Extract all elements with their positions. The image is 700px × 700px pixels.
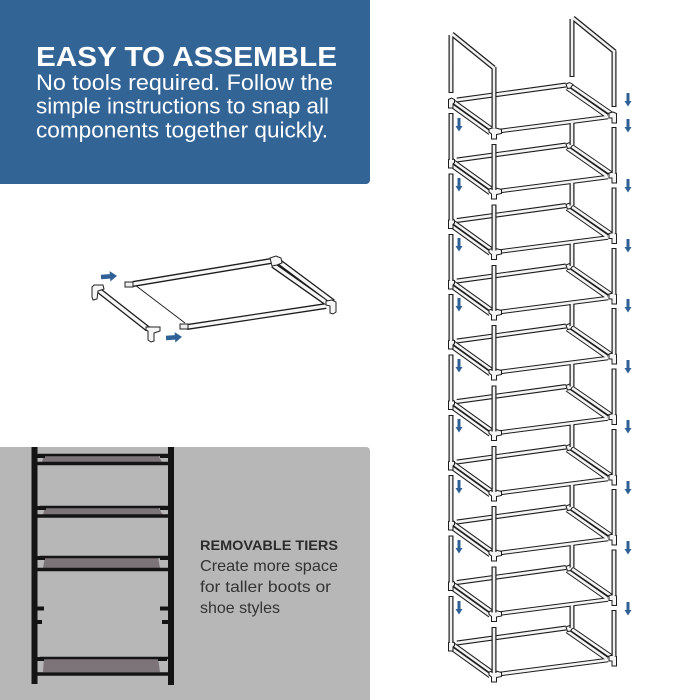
text block: instructions: No tools required. Follow the [36, 70, 333, 95]
tier 3 [448, 174, 616, 260]
tier 5 [448, 294, 616, 380]
text block: removable tiers: REMOVABLE TIERS [200, 538, 338, 553]
tier 8 [448, 475, 616, 561]
tier 9 [448, 536, 616, 622]
arrows: right side [624, 93, 632, 616]
tier 7 [448, 415, 616, 501]
panel: easy to assemble [0, 0, 370, 184]
tier 2 [448, 113, 616, 199]
text block: instructions: simple instructions to snap all [36, 94, 329, 118]
text block: instructions [36, 70, 333, 142]
detached rail [92, 285, 160, 342]
arrow: upper push [101, 271, 117, 282]
text block: removable tiers [200, 538, 338, 617]
text block: instructions: components together quickly. [36, 118, 328, 142]
top frame: rear U [572, 18, 615, 107]
tier 6 [448, 354, 616, 440]
heading: easy to assemble: EASY TO ASSEMBLE [36, 41, 337, 72]
tier 10 [448, 596, 616, 682]
illustration: exploded tower [448, 18, 632, 682]
text block: removable tiers: shoe styles [200, 600, 280, 617]
tier 1 [448, 82, 616, 139]
tier 4 [448, 234, 616, 320]
thin fabric edge [135, 285, 185, 323]
illustration: frame assembly [92, 256, 336, 343]
shelf fabric [42, 455, 163, 672]
text block: removable tiers: Create more space [200, 558, 338, 575]
top frame: front U [451, 34, 494, 128]
arrows: left side [456, 118, 462, 614]
panel: removable tiers [0, 447, 370, 700]
photo: shoe rack [33, 447, 173, 685]
arrow: lower push [166, 332, 182, 343]
text block: removable tiers: for taller boots or [200, 579, 332, 596]
